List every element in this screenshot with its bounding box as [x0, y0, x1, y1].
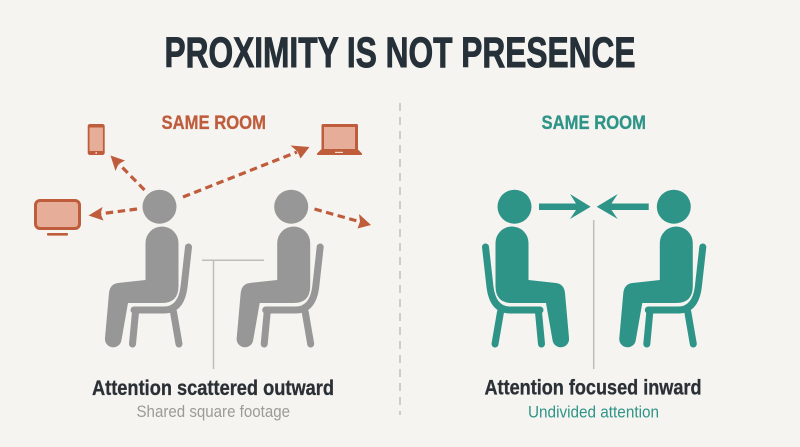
person: right teal	[619, 190, 703, 347]
icon: laptop	[317, 124, 362, 155]
heading: same room right: SAME ROOM	[542, 113, 646, 134]
icon: phone	[88, 124, 105, 155]
table	[202, 260, 264, 369]
arrow: off to the right	[314, 209, 371, 228]
arrow: inward from left	[539, 194, 591, 219]
panel: focused attention	[484, 113, 703, 422]
person: left grey	[105, 190, 188, 347]
person: left teal	[486, 190, 569, 347]
caption: scattered: Attention scattered outward	[92, 377, 334, 400]
arrow: inward from right	[597, 194, 649, 219]
title: PROXIMITY IS NOT PRESENCE	[164, 29, 636, 77]
icon: monitor	[36, 200, 80, 236]
heading: same room left: SAME ROOM	[162, 113, 266, 134]
subcaption: undivided attention: Undivided attention	[528, 404, 659, 422]
panel: scattered attention	[36, 113, 371, 421]
arrow: to laptop	[183, 146, 310, 197]
person: right grey	[237, 190, 320, 347]
caption: focused: Attention focused inward	[484, 376, 702, 400]
subcaption: shared square footage: Shared square footage	[136, 403, 290, 421]
arrow: to monitor	[88, 207, 137, 220]
arrow: to phone	[110, 156, 144, 190]
